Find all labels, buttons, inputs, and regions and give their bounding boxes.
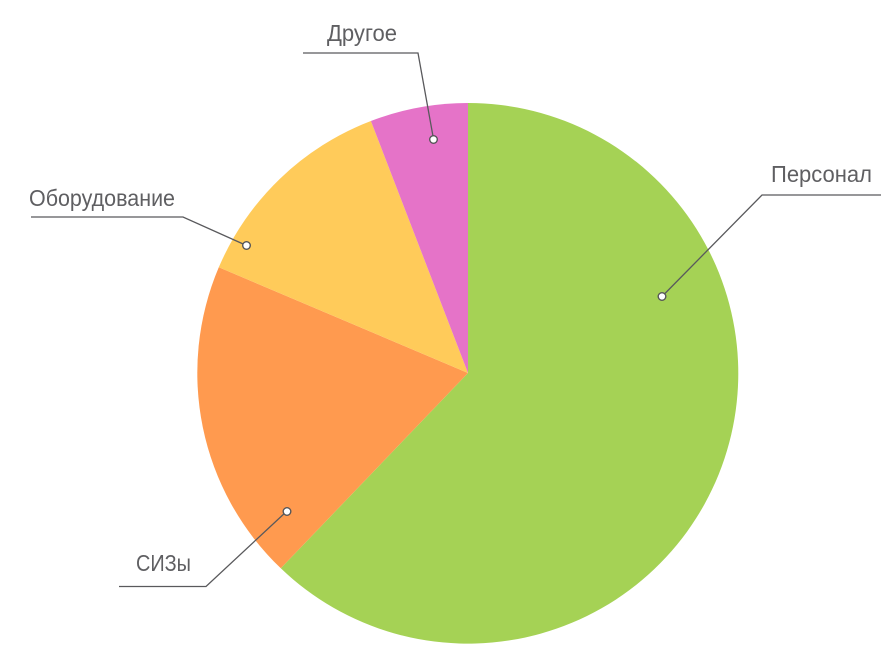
callout: СИЗы: СИЗы	[136, 550, 191, 576]
callout: Оборудование: Оборудование	[29, 185, 175, 211]
callout: Персонал	[658, 161, 881, 300]
pie slice: Персонал	[281, 103, 738, 644]
callout: Другое	[303, 20, 437, 143]
callout: СИЗы	[119, 508, 291, 586]
pie slice: Оборудование	[219, 121, 468, 373]
callout: Другое: Другое	[327, 20, 397, 46]
callout: Оборудование	[29, 185, 250, 249]
pie slice: Другое	[371, 103, 468, 373]
pie slice: СИЗы	[197, 267, 468, 568]
callout: Персонал: Персонал	[771, 161, 872, 187]
